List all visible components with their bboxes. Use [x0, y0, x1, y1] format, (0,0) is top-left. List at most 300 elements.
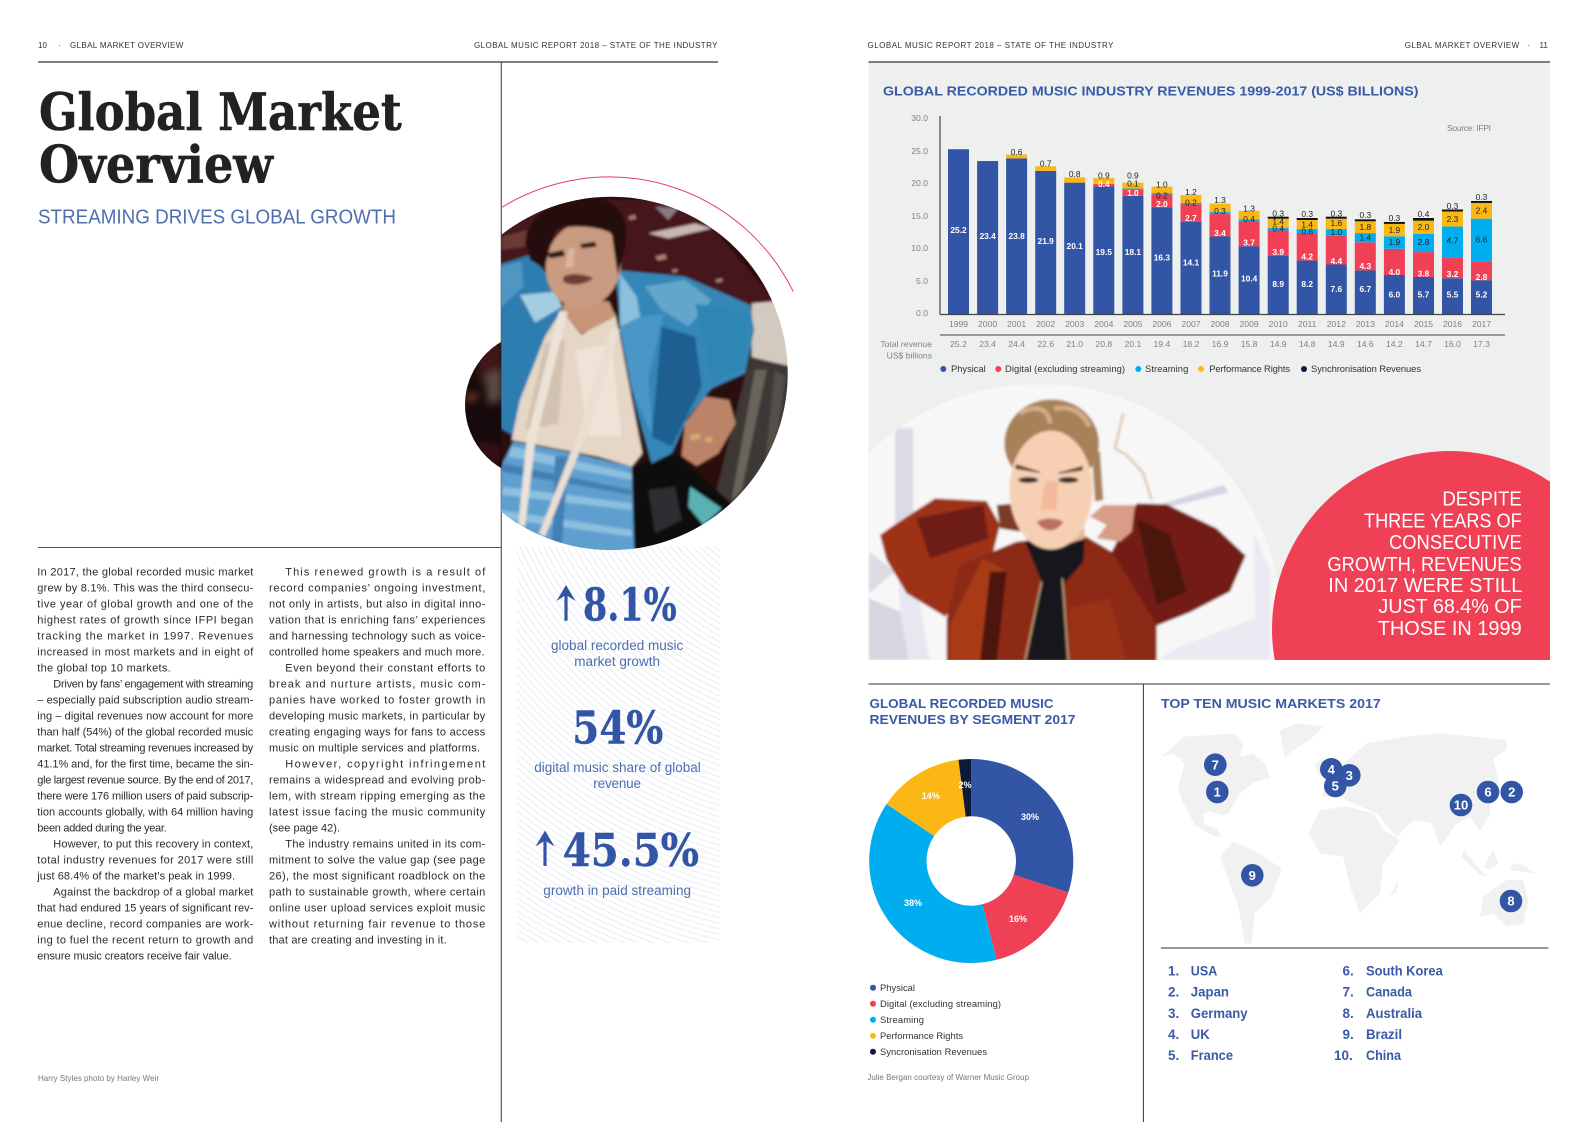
total revenue row: 18.2 [1183, 339, 1200, 349]
year labels: 2012 [1327, 319, 1346, 329]
performance rights value labels: 0.8 [1069, 169, 1081, 179]
ranking list: 2. [1168, 984, 1179, 1000]
red callout circle [1272, 451, 1550, 660]
hair behind head [1002, 398, 1100, 470]
y axis labels: 5.0 [916, 276, 928, 286]
donut chart [869, 759, 1073, 963]
segment legend: Syncronisation Revenues [880, 1046, 987, 1057]
performance rights value labels: 1.3 [1214, 195, 1226, 205]
year labels: 2011 [1298, 319, 1317, 329]
body text column 1: just 68.4% of the market’s peak in 1999. [36, 870, 235, 882]
digital value labels: 3.2 [1447, 269, 1459, 279]
total revenue row: 16.9 [1212, 339, 1229, 349]
body text column 2: that are creating and investing in it. [269, 934, 447, 946]
right page header: GLOBAL MUSIC REPORT 2018 – STATE OF THE INDUSTRY [868, 41, 1114, 50]
physical value labels: 8.9 [1272, 279, 1284, 289]
left page header: GLOBAL MUSIC REPORT 2018 – STATE OF THE INDUSTRY [474, 41, 718, 50]
right page header: 11 [1540, 41, 1548, 50]
icon: up arrow [556, 585, 576, 621]
body text column 1: the global top 10 markets. [37, 662, 171, 674]
year labels: 2016 [1443, 319, 1462, 329]
body text column 1: Against the backdrop of a global market [53, 886, 253, 898]
year labels: 2013 [1356, 319, 1375, 329]
map markers: 5 [1332, 779, 1339, 794]
segment heading: REVENUES BY SEGMENT 2017 [870, 712, 1076, 727]
body text column 2: and harnessing technology such as voice- [269, 630, 486, 642]
body text column 2: mitment to solve the value gap (see page [269, 854, 485, 866]
segment heading: GLOBAL RECORDED MUSIC [870, 696, 1054, 711]
digital value labels: 4.2 [1301, 252, 1313, 262]
ranking list: UK [1191, 1027, 1210, 1042]
body text column 1 [36, 566, 254, 962]
map markers: 8 [1507, 894, 1515, 909]
body text column 2: record companies’ ongoing investment, [269, 582, 485, 594]
performance rights value labels: 0.9 [1098, 170, 1110, 180]
physical value labels: 7.6 [1330, 284, 1342, 294]
performance rights value labels [1011, 147, 1488, 235]
total revenue row: 20.8 [1095, 339, 1112, 349]
body text column 1: 41.1% and, for the first time, became the sin- [37, 758, 254, 770]
bars [948, 149, 1492, 314]
chart legend [940, 363, 1421, 374]
ranking list: USA [1191, 964, 1218, 978]
body text column 2: without returning fair revenue to those [268, 918, 485, 930]
streaming value labels: 0.3 [1214, 206, 1226, 216]
synchronisation value labels: 0.3 [1330, 208, 1342, 218]
donut chart: 16% [1009, 914, 1027, 924]
chart title: GLOBAL RECORDED MUSIC INDUSTRY REVENUES 1999-2017 (US$ BILLIONS) [883, 84, 1418, 98]
body text column 2: online user upload services exploit music [269, 902, 486, 914]
digital value labels: 4.4 [1330, 256, 1342, 266]
digital value labels [1098, 179, 1488, 282]
ranking list: Canada [1366, 984, 1412, 1000]
ranking list: 7. [1342, 984, 1354, 1000]
year labels: 2009 [1240, 319, 1259, 329]
photo credit left: Harry Styles photo by Harley Weir [38, 1074, 159, 1083]
performance rights value labels: 1.3 [1243, 203, 1255, 213]
streaming value labels: 0.4 [1272, 223, 1284, 233]
jeans [498, 442, 634, 553]
right page header: GLBAL MARKET OVERVIEW [1405, 41, 1520, 50]
map markers: 2 [1508, 785, 1515, 800]
map markers [1204, 753, 1523, 912]
title: Overview [39, 136, 274, 196]
segment legend [870, 982, 1001, 1057]
body text column 2: controlled home speakers and much more. [269, 646, 484, 658]
total revenue row: 16.0 [1444, 339, 1461, 349]
body text column 2: remains a widespread and evolving prob- [269, 774, 486, 786]
donut chart: 30% [1021, 812, 1039, 822]
photo: woman in rust bomber jacket [857, 385, 1283, 672]
segment legend: Physical [880, 982, 915, 993]
streaming value labels: 6.6 [1476, 234, 1488, 244]
y axis labels: 20.0 [911, 178, 928, 188]
synchronisation value labels: 0.3 [1389, 213, 1401, 223]
physical value labels: 16.3 [1154, 252, 1170, 262]
source note: Source: IFPI [1447, 123, 1491, 133]
body text column 1: tracking the market in 1997. Revenues [37, 630, 254, 642]
segment legend: Streaming [880, 1014, 924, 1025]
callout text: DESPITE [1442, 488, 1522, 510]
stat: paid streaming [536, 824, 699, 898]
y axis labels: 10.0 [911, 243, 928, 253]
stat: market growth: global recorded music [551, 638, 684, 653]
left page rules [38, 62, 718, 1122]
total revenue row: 14.9 [1328, 339, 1345, 349]
map markers: 1 [1214, 785, 1221, 800]
y axis labels [911, 113, 928, 318]
body text column 1: total industry revenues for 2017 were still [37, 854, 253, 866]
year labels: 2002 [1036, 319, 1055, 329]
chart legend: Digital (excluding streaming) [1005, 363, 1125, 374]
performance rights value labels: 2.3 [1447, 214, 1459, 224]
synchronisation value labels: 0.3 [1476, 192, 1488, 202]
ranking list: 6. [1342, 964, 1354, 978]
streaming value labels: 0.4 [1243, 214, 1255, 224]
body text column 2: developing music markets, in particular by [269, 710, 486, 722]
body text column 1: been added during the year. [37, 822, 167, 834]
brows and eyes [1016, 465, 1082, 473]
physical value labels: 19.5 [1096, 247, 1112, 257]
body text column 2: break and nurture artists, music com- [269, 678, 486, 690]
ranking list: 1. [1168, 964, 1179, 978]
performance rights value labels: 0.6 [1011, 147, 1023, 157]
digital value labels: 3.7 [1243, 238, 1255, 248]
chart legend: Synchronisation Revenues [1311, 363, 1421, 374]
digital value labels: 3.8 [1418, 268, 1430, 278]
stat: paid streaming: growth in paid streaming [543, 883, 691, 898]
body text column 2: panies have worked to foster growth in [269, 694, 485, 706]
callout text: CONSECUTIVE [1389, 531, 1522, 554]
streaming value labels: 0.2 [1156, 190, 1168, 200]
physical value labels: 11.9 [1212, 268, 1228, 278]
axes [940, 116, 1505, 335]
body text column 1: – especially paid subscription audio stream- [37, 694, 254, 706]
digital value labels: 4.0 [1389, 267, 1401, 277]
performance rights value labels: 1.6 [1330, 218, 1342, 228]
map markers: 10 [1454, 798, 1468, 813]
body text column 2: 26), the most significant roadblock on the [269, 870, 485, 882]
total revenue row: 14.9 [1270, 339, 1287, 349]
physical value labels: 6.0 [1389, 289, 1401, 299]
small dark circle behind photo [465, 342, 502, 468]
performance rights value labels: 1.0 [1156, 179, 1168, 189]
body text column 2: However, copyright infringement [285, 758, 485, 770]
year labels: 2008 [1210, 319, 1230, 329]
segment legend: Digital (excluding streaming) [880, 998, 1001, 1009]
head [1026, 526, 1086, 546]
body text column 1: tive year of global growth and one of the [37, 598, 253, 610]
callout text: THREE YEARS OF [1364, 510, 1522, 532]
donut chart: 14% [922, 791, 940, 801]
performance rights value labels: 2.0 [1418, 222, 1430, 232]
wood right [752, 300, 792, 367]
digital value labels: 2.7 [1185, 213, 1197, 223]
title: Global Market [39, 83, 402, 143]
segment legend: Performance Rights [880, 1030, 963, 1041]
ranking list: Japan [1191, 984, 1229, 1000]
dark lower [632, 452, 732, 548]
total revenue row: 14.2 [1386, 339, 1403, 349]
callout text: THOSE IN 1999 [1378, 617, 1522, 640]
year labels: 2010 [1269, 319, 1288, 329]
body text column 2: creating engaging ways for fans to access [269, 726, 486, 738]
shirt [512, 310, 642, 467]
ranking list: 5. [1168, 1048, 1179, 1063]
digital value labels: 0.4 [1098, 179, 1110, 189]
synchronisation value labels: 0.4 [1418, 209, 1430, 219]
donut chart: 38% [904, 898, 922, 908]
body text column 2: music on multiple services and platforms. [269, 742, 480, 754]
black top [1025, 538, 1085, 662]
map markers: 9 [1249, 868, 1256, 883]
map markers: 4 [1328, 762, 1336, 777]
body text column 1: ing – digital revenues now account for more [37, 710, 253, 722]
physical value labels: 8.2 [1301, 279, 1313, 289]
total revenue row: 15.8 [1241, 339, 1258, 349]
physical value labels: 18.1 [1125, 247, 1141, 257]
body text column 1: ing to fuel the recent return to growth and [37, 934, 253, 946]
body text column 2 [268, 566, 486, 946]
total revenue row: 14.8 [1299, 339, 1316, 349]
right page top rule [868, 61, 1550, 63]
physical value labels: 5.7 [1418, 289, 1430, 299]
ranking list: 8. [1342, 1006, 1354, 1021]
year labels: 2015 [1414, 319, 1433, 329]
performance rights value labels: 1.4 [1272, 217, 1284, 227]
stacked bar chart [880, 113, 1505, 374]
y axis labels: 25.0 [911, 146, 928, 156]
body text column 1: market. Total streaming revenues increased by [37, 742, 254, 754]
stat: digital share: 54% [572, 701, 663, 754]
panel: top ten markets [1161, 696, 1535, 1063]
total revenue row: US$ billions [887, 350, 932, 360]
physical value labels: 6.7 [1359, 284, 1371, 294]
left page header [38, 41, 718, 50]
streaming value labels: 1.0 [1330, 227, 1342, 237]
physical value labels: 21.9 [1038, 236, 1054, 246]
right page header [868, 41, 1548, 50]
year labels: 2017 [1472, 319, 1491, 329]
ranking list: 9. [1342, 1027, 1354, 1042]
total revenue row [880, 339, 1490, 360]
physical value labels: 23.4 [979, 231, 996, 241]
stat: market growth: market growth [574, 654, 660, 669]
digital value labels: 4.3 [1359, 261, 1371, 271]
stat: market growth: 8.1% [583, 579, 677, 632]
y axis labels: 15.0 [911, 211, 928, 221]
photo credit right: Julie Bergan courtesy of Warner Music Group [867, 1073, 1030, 1082]
map markers: 7 [1212, 757, 1219, 772]
stat: paid streaming: 45.5% [563, 824, 699, 877]
chart legend: Streaming [1145, 363, 1188, 374]
lower section rules [868, 684, 1550, 1122]
body text column 1: tion accounts globally, with 64 million having [37, 806, 253, 818]
ranking list: China [1366, 1048, 1401, 1063]
physical value labels: 5.5 [1447, 289, 1459, 299]
body text column 1: ensure music creators receive fair value. [37, 950, 232, 962]
performance rights value labels: 1.9 [1389, 225, 1401, 235]
body text column 2: lem, with stream ripping emerging as the [269, 790, 485, 802]
streaming value labels [1127, 178, 1488, 247]
physical value labels: 14.1 [1183, 257, 1199, 267]
synchronisation value labels [1272, 192, 1488, 223]
year labels: 2014 [1385, 319, 1404, 329]
ranking list: South Korea [1366, 964, 1443, 978]
ranking list: Australia [1366, 1006, 1422, 1021]
callout text [1327, 488, 1522, 640]
body text column 2: vation that is enriching fans’ experiences [269, 614, 486, 626]
map markers: 6 [1484, 785, 1492, 800]
ranking list: 4. [1168, 1027, 1179, 1042]
body text column 2: (see page 42). [269, 822, 340, 834]
body text column 2: The industry remains united in its com- [285, 838, 486, 850]
stat: digital share: revenue [593, 776, 641, 791]
stats background hatch [517, 546, 720, 943]
grey chart and photo panel [868, 62, 1550, 660]
map heading: TOP TEN MUSIC MARKETS 2017 [1161, 696, 1381, 711]
head [562, 298, 616, 334]
chart legend: Performance Rights [1209, 363, 1290, 374]
synchronisation value labels: 0.3 [1359, 210, 1371, 220]
ranking list: France [1191, 1048, 1233, 1063]
year labels: 2003 [1065, 319, 1084, 329]
total revenue row: 20.1 [1125, 339, 1141, 349]
performance rights value labels: 0.9 [1127, 170, 1139, 180]
hands [1090, 505, 1135, 542]
chart legend: Physical [951, 363, 986, 374]
digital value labels: 1.0 [1127, 188, 1139, 198]
streaming value labels: 1.9 [1389, 237, 1401, 247]
body text column 1: Driven by fans’ engagement with streaming [53, 678, 253, 690]
performance rights value labels: 1.2 [1185, 187, 1197, 197]
straps [518, 312, 568, 527]
total revenue row: 22.6 [1037, 339, 1054, 349]
callout text: IN 2017 WERE STILL [1328, 574, 1522, 597]
body text column 2: Even beyond their constant efforts to [285, 662, 485, 674]
performance rights value labels: 0.7 [1040, 159, 1052, 169]
synchronisation value labels: 0.3 [1301, 209, 1313, 219]
total revenue row: 17.3 [1473, 339, 1490, 349]
body text column 2: path to sustainable growth, where certain [269, 886, 485, 898]
callout text: JUST 68.4% OF [1378, 595, 1522, 618]
total revenue row: 24.4 [1008, 339, 1025, 349]
streaming value labels: 0.6 [1301, 227, 1313, 237]
year labels: 2001 [1007, 319, 1026, 329]
performance rights value labels: 2.4 [1476, 205, 1488, 215]
subtitle: STREAMING DRIVES GLOBAL GROWTH [38, 206, 396, 228]
year labels: 2005 [1123, 319, 1143, 329]
stat: market growth [551, 579, 684, 669]
total revenue row: 21.0 [1066, 339, 1083, 349]
photo: man in blue velvet jacket [498, 193, 792, 553]
left page header: GLBAL MARKET OVERVIEW [70, 41, 184, 50]
ranking list: 10. [1334, 1048, 1353, 1063]
body text column 1: that had endured 15 years of significant rev- [37, 902, 254, 914]
synchronisation value labels: 0.3 [1447, 201, 1459, 211]
synchronisation value labels: 0.3 [1272, 208, 1284, 218]
body text column 1: increased in most markets and in eight of [37, 646, 254, 658]
body text column 2: not only in artists, but also in digital inno- [269, 598, 486, 610]
y axis labels: 30.0 [911, 113, 928, 123]
streaming value labels: 4.7 [1447, 235, 1459, 245]
body text column 1: However, to put this recovery in context, [53, 838, 253, 850]
stat: digital share [534, 701, 701, 791]
total revenue row: 25.2 [950, 339, 967, 349]
digital value labels: 3.4 [1214, 228, 1226, 238]
jacket body [498, 255, 562, 437]
streaming value labels: 0.1 [1127, 178, 1139, 188]
left page header: · [58, 41, 61, 50]
body text column 2: latest issue facing the music community [269, 806, 486, 818]
performance rights value labels: 1.4 [1301, 219, 1313, 229]
lapels [618, 273, 664, 435]
total revenue row: 14.6 [1357, 339, 1374, 349]
ranking list: Brazil [1366, 1027, 1402, 1042]
donut chart: 2% [958, 780, 972, 790]
red arc decoration [501, 177, 793, 292]
performance rights value labels: 1.8 [1359, 222, 1371, 232]
streaming value labels: 0.2 [1185, 197, 1197, 207]
body text column 1: gle largest revenue source. By the end of 2017, [37, 774, 253, 786]
body text column 1: highest rates of growth since IFPI began [37, 614, 253, 626]
physical value labels [950, 225, 1488, 299]
icon: up arrow [536, 830, 554, 866]
hand [682, 397, 736, 466]
total revenue row: 19.4 [1154, 339, 1170, 349]
streaming value labels: 1.4 [1359, 233, 1371, 243]
callout text: GROWTH, REVENUES [1327, 553, 1522, 576]
physical value labels: 20.1 [1067, 241, 1083, 251]
physical value labels: 25.2 [950, 225, 967, 235]
body text column 1: there were 176 million users of paid subscrip- [37, 790, 254, 802]
body text column 1: than half (54%) of the global recorded music [37, 726, 254, 738]
total revenue row: 14.7 [1415, 339, 1432, 349]
digital value labels: 3.9 [1272, 247, 1284, 257]
stat: digital share: digital music share of global [534, 760, 701, 775]
ranking list: 3. [1168, 1006, 1179, 1021]
total revenue row: Total revenue [880, 339, 932, 349]
map markers: 3 [1346, 768, 1353, 783]
title [39, 83, 402, 196]
year labels: 2007 [1181, 319, 1201, 329]
ranking list [1168, 964, 1443, 1063]
total revenue row: 23.4 [979, 339, 996, 349]
ranking list: Germany [1191, 1006, 1248, 1021]
year labels: 2006 [1152, 319, 1172, 329]
jacket [880, 498, 1000, 617]
right page header: · [1528, 41, 1530, 50]
body text column 2: This renewed growth is a result of [285, 566, 486, 578]
panel: revenues by segment [869, 696, 1076, 1057]
year labels: 1999 [949, 319, 968, 329]
physical value labels: 5.2 [1476, 289, 1488, 299]
left page header: 10 [38, 41, 48, 50]
world map [1162, 723, 1535, 943]
digital value labels: 2.8 [1476, 272, 1488, 282]
year labels [949, 319, 1491, 329]
y axis labels: 0.0 [916, 308, 928, 318]
body text column 1: In 2017, the global recorded music market [37, 566, 253, 578]
physical value labels: 23.8 [1008, 231, 1025, 241]
body text column 1: grew by 8.1%. This was the third consecu- [37, 582, 254, 594]
streaming value labels: 2.8 [1418, 237, 1430, 247]
body text column 1: enue decline, record companies are work- [37, 918, 254, 930]
year labels: 2004 [1094, 319, 1114, 329]
physical value labels: 10.4 [1241, 273, 1258, 283]
year labels: 2000 [978, 319, 997, 329]
digital value labels: 2.0 [1156, 199, 1168, 209]
